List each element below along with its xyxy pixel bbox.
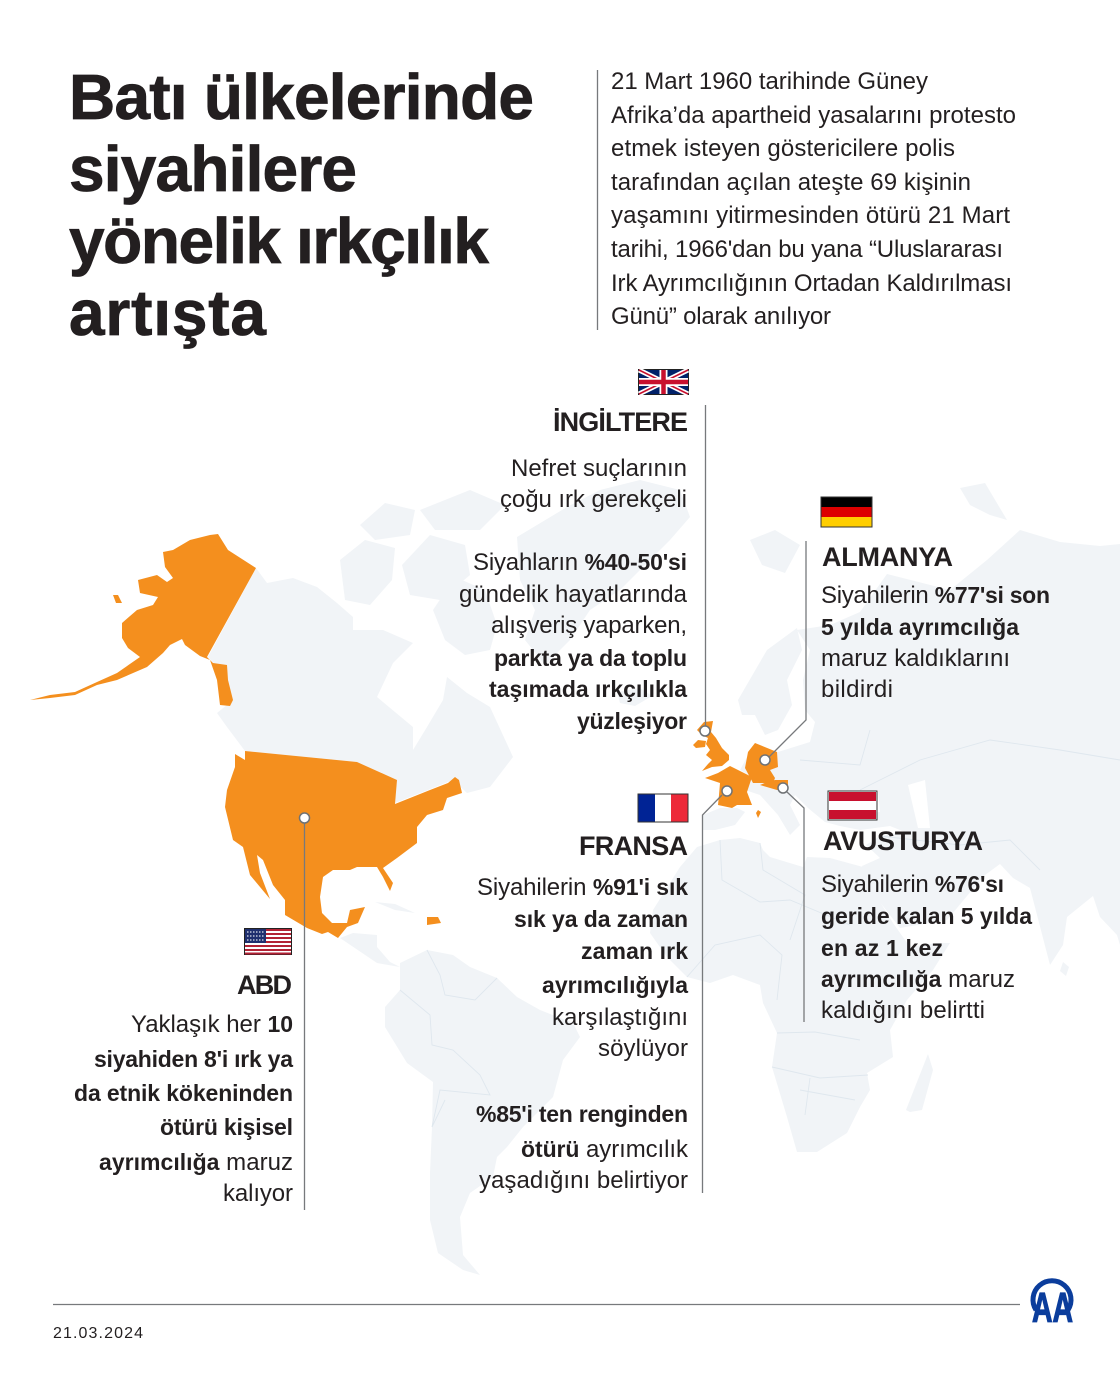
country: USA and Alaska	[30, 534, 462, 938]
body text: Siyahilerin %77'si son	[821, 582, 1050, 609]
intro text block: Günü” olarak anılıyor	[611, 303, 831, 330]
heading: FRANSA	[579, 831, 688, 861]
intro text block: Afrika’da apartheid yasalarını protesto	[611, 102, 1016, 129]
logo: AA: AA	[1032, 1284, 1073, 1331]
body text: yaşadığını belirtiyor	[479, 1167, 688, 1194]
intro text block: Irk Ayrımcılığının Ortadan Kaldırılması	[611, 270, 1012, 297]
body text: Siyahların %40-50'si	[473, 549, 687, 576]
body text: kaldığını belirtti	[821, 997, 985, 1024]
flag: USA	[244, 928, 292, 954]
intro text block: tarafından açılan ateşte 69 kişinin	[611, 169, 971, 196]
intro text block: etmek isteyen göstericilere polis	[611, 135, 955, 162]
body text: ayrımcılığıyla	[542, 972, 688, 998]
footer	[53, 1281, 1073, 1342]
body text: taşımada ırkçılıkla	[489, 676, 687, 702]
body text: maruz kaldıklarını	[821, 645, 1010, 672]
body text: kalıyor	[223, 1180, 293, 1207]
country: Germany	[745, 743, 778, 783]
heading: ABD	[237, 970, 292, 1000]
title: yönelik ırkçılık	[69, 205, 489, 277]
panel: Avusturya	[787, 791, 1032, 1024]
heading: ALMANYA	[822, 542, 953, 572]
body text: Yaklaşık her 10	[131, 1011, 293, 1038]
body text	[821, 871, 1032, 1024]
body text: ötürü kişisel	[160, 1114, 293, 1140]
connector line	[787, 792, 804, 1022]
world map background	[208, 480, 1120, 1275]
heading: AVUSTURYA	[823, 826, 983, 856]
connector line	[704, 405, 706, 726]
body text: parkta ya da toplu	[494, 645, 687, 671]
panel: Almanya	[769, 497, 1050, 757]
title	[69, 61, 534, 349]
body text: yüzleşiyor	[577, 708, 687, 734]
body text: zaman ırk	[581, 938, 688, 964]
body text: siyahiden 8'i ırk ya	[94, 1046, 293, 1072]
map markers	[300, 726, 788, 823]
body text	[476, 874, 689, 1194]
body text: ötürü ayrımcılık	[521, 1136, 689, 1163]
body text: ayrımcılığa maruz	[821, 966, 1015, 993]
intro text block: yaşamını yitirmesinden ötürü 21 Mart	[611, 202, 1010, 229]
body text: gündelik hayatlarında	[459, 581, 688, 608]
highlighted countries on map	[30, 534, 788, 938]
body text	[821, 582, 1050, 703]
panel: Fransa	[476, 794, 722, 1194]
intro text block: 21 Mart 1960 tarihinde Güney	[611, 68, 928, 95]
connector line	[304, 823, 306, 1210]
flag: United Kingdom	[638, 370, 688, 394]
body text	[459, 455, 688, 734]
flag: Germany	[821, 497, 872, 527]
body text: 5 yılda ayrımcılığa	[821, 614, 1019, 640]
connector line	[702, 795, 722, 1193]
intro text block	[598, 68, 1016, 330]
date: 21.03.2024	[53, 1325, 143, 1342]
flag: Austria	[828, 791, 877, 820]
body text: çoğu ırk gerekçeli	[500, 486, 687, 513]
body text: Siyahilerin %76'sı	[821, 871, 1004, 898]
body text: Nefret suçlarının	[511, 455, 687, 482]
country: France	[705, 766, 761, 818]
country: United Kingdom	[693, 721, 729, 771]
body text: alışveriş yaparken,	[491, 612, 687, 639]
body text: söylüyor	[598, 1035, 688, 1062]
panel: İngiltere	[459, 370, 706, 734]
body text: %85'i ten renginden	[476, 1101, 688, 1127]
body text	[74, 1011, 293, 1207]
body text: ayrımcılığa maruz	[99, 1149, 293, 1176]
body text: geride kalan 5 yılda	[821, 903, 1032, 929]
title: Batı ülkelerinde	[69, 61, 534, 133]
flag: France	[638, 794, 688, 822]
body text: da etnik kökeninden	[74, 1080, 293, 1106]
panel: ABD	[74, 823, 304, 1210]
country: Austria	[760, 780, 788, 790]
connector line	[769, 541, 806, 757]
title: siyahilere	[69, 133, 357, 205]
body text: sık ya da zaman	[514, 906, 688, 932]
body text: bildirdi	[821, 676, 893, 703]
intro text block: tarihi, 1966'dan bu yana “Uluslararası	[611, 236, 1003, 263]
title: artışta	[69, 277, 266, 349]
heading: İNGİLTERE	[553, 407, 688, 437]
body text: karşılaştığını	[552, 1004, 688, 1031]
body text: en az 1 kez	[821, 935, 943, 961]
body text: Siyahilerin %91'i sık	[477, 874, 688, 901]
logo: AA	[1032, 1281, 1073, 1331]
